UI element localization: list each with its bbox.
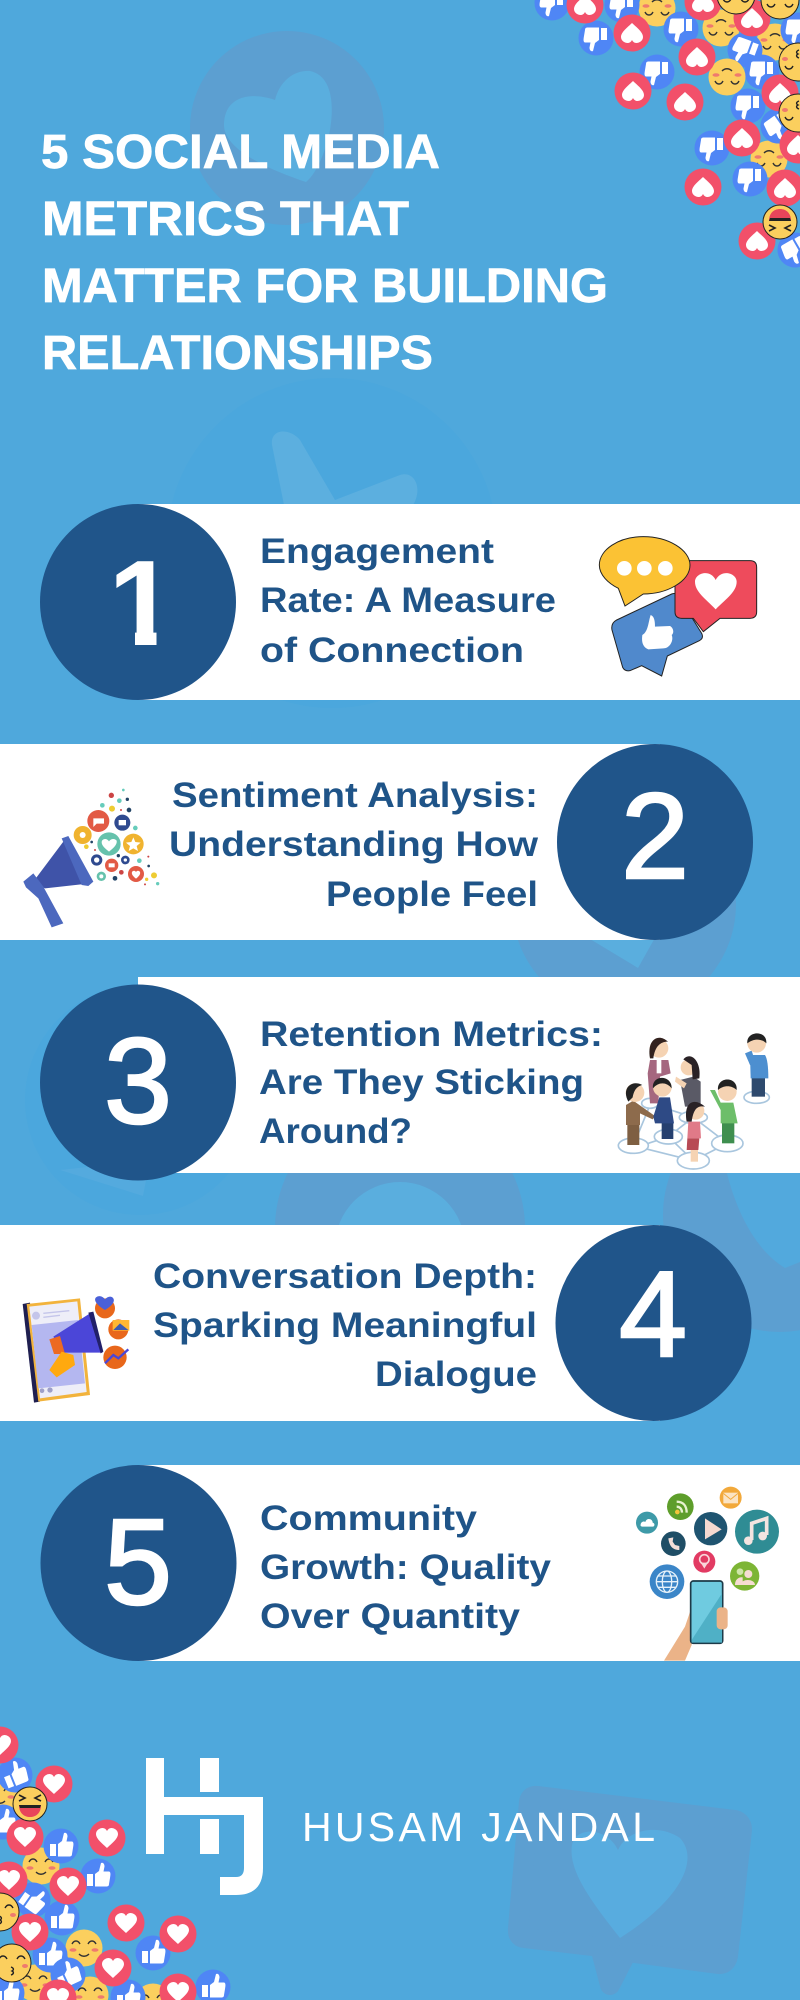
heading: conversation depth: Sparking Meaningful [153, 1306, 537, 1345]
heading: conversation depth: Dialogue [375, 1355, 537, 1394]
title [41, 126, 608, 380]
heading: sentiment analysis: Sentiment Analysis: [172, 776, 538, 815]
person: man in navy [653, 1078, 674, 1139]
number 3: 3 [104, 1013, 172, 1149]
heading: retention metrics: Around? [259, 1112, 412, 1151]
decorative reaction cluster: top right [534, 0, 800, 274]
heading: community growth: Community [260, 1499, 478, 1538]
panel 1: engagement rate [40, 504, 800, 700]
icon: hand with phone and app bubbles [636, 1487, 779, 1661]
heading: community growth [260, 1499, 552, 1636]
heading: community growth: Growth: Quality [260, 1548, 552, 1587]
heading: community growth: Over Quantity [260, 1597, 521, 1636]
icon: megaphone with social bubbles [23, 789, 159, 927]
person: man in green [710, 1079, 738, 1143]
heading: conversation depth [153, 1257, 537, 1394]
heading: engagement rate: Engagement [260, 532, 494, 571]
brand name: HUSAM JANDAL [302, 1804, 655, 1850]
title: RELATIONSHIPS [42, 327, 433, 380]
icon: chat reaction bubbles [599, 537, 757, 676]
heading: sentiment analysis: Understanding How [169, 825, 539, 864]
number 4: 4 [619, 1246, 687, 1382]
heading: sentiment analysis: People Feel [326, 875, 538, 914]
number 5: 5 [104, 1494, 172, 1630]
person: woman in pink [686, 1102, 705, 1162]
panel 2: sentiment analysis [0, 744, 753, 940]
person: man in brown [626, 1083, 655, 1145]
title: METRICS THAT [42, 193, 409, 246]
decorative reaction cluster: bottom left [0, 1726, 230, 2000]
heading: conversation depth: Conversation Depth: [153, 1257, 537, 1296]
number 1: 1 [108, 535, 176, 671]
icon: phone with megaphone [23, 1296, 129, 1403]
icon: connected group of people [618, 1033, 769, 1169]
heading: retention metrics: Retention Metrics: [260, 1015, 603, 1054]
number 2: 2 [621, 768, 689, 904]
logo mark: HJ monogram [146, 1758, 263, 1895]
heading: engagement rate: Rate: A Measure [260, 581, 556, 620]
title: MATTER FOR BUILDING [42, 260, 608, 313]
panel 4: conversation depth [0, 1225, 752, 1421]
heading: engagement rate [260, 532, 556, 670]
panel 5: community growth [40, 1465, 800, 1661]
heading: engagement rate: of Connection [260, 631, 524, 670]
panel 3: retention metrics [40, 977, 800, 1180]
person: woman in gray [675, 1056, 701, 1107]
heading: retention metrics: Are They Sticking [259, 1063, 584, 1102]
heading: retention metrics [259, 1015, 603, 1151]
person: blue [745, 1033, 768, 1097]
person: woman in mauve [648, 1038, 671, 1103]
title: 5 SOCIAL MEDIA [41, 126, 440, 179]
heading: sentiment analysis [169, 776, 539, 914]
